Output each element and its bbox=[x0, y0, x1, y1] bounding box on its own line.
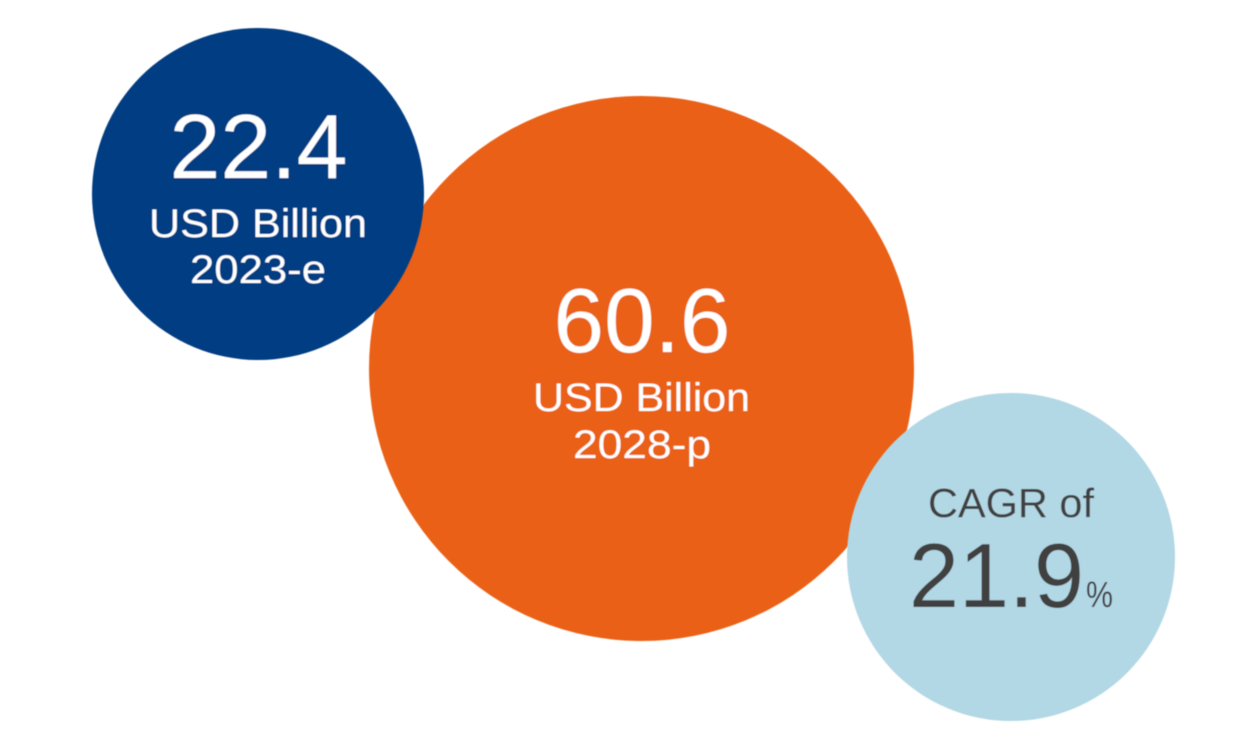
bubble: 2028 projected market size: USD Billion bbox=[533, 376, 750, 420]
bubble: CAGR: % bbox=[1086, 574, 1113, 615]
bubble: CAGR bbox=[847, 393, 1175, 721]
bubble: 2028 projected market size: 2028-p bbox=[573, 423, 711, 467]
bubble: 2023 estimated market size: USD Billion bbox=[149, 202, 367, 246]
bubble: CAGR: 21.9 bbox=[909, 526, 1084, 627]
bubble: 2023 estimated market size: 2023-e bbox=[190, 248, 326, 292]
bubble: 2023 estimated market size bbox=[92, 28, 424, 360]
bubble: 2023 estimated market size: 22.4 bbox=[170, 97, 348, 198]
bubble: 2028 projected market size: 60.6 bbox=[554, 271, 730, 372]
bubble: CAGR: CAGR of bbox=[928, 480, 1095, 526]
bubble: 2028 projected market size bbox=[369, 96, 914, 641]
